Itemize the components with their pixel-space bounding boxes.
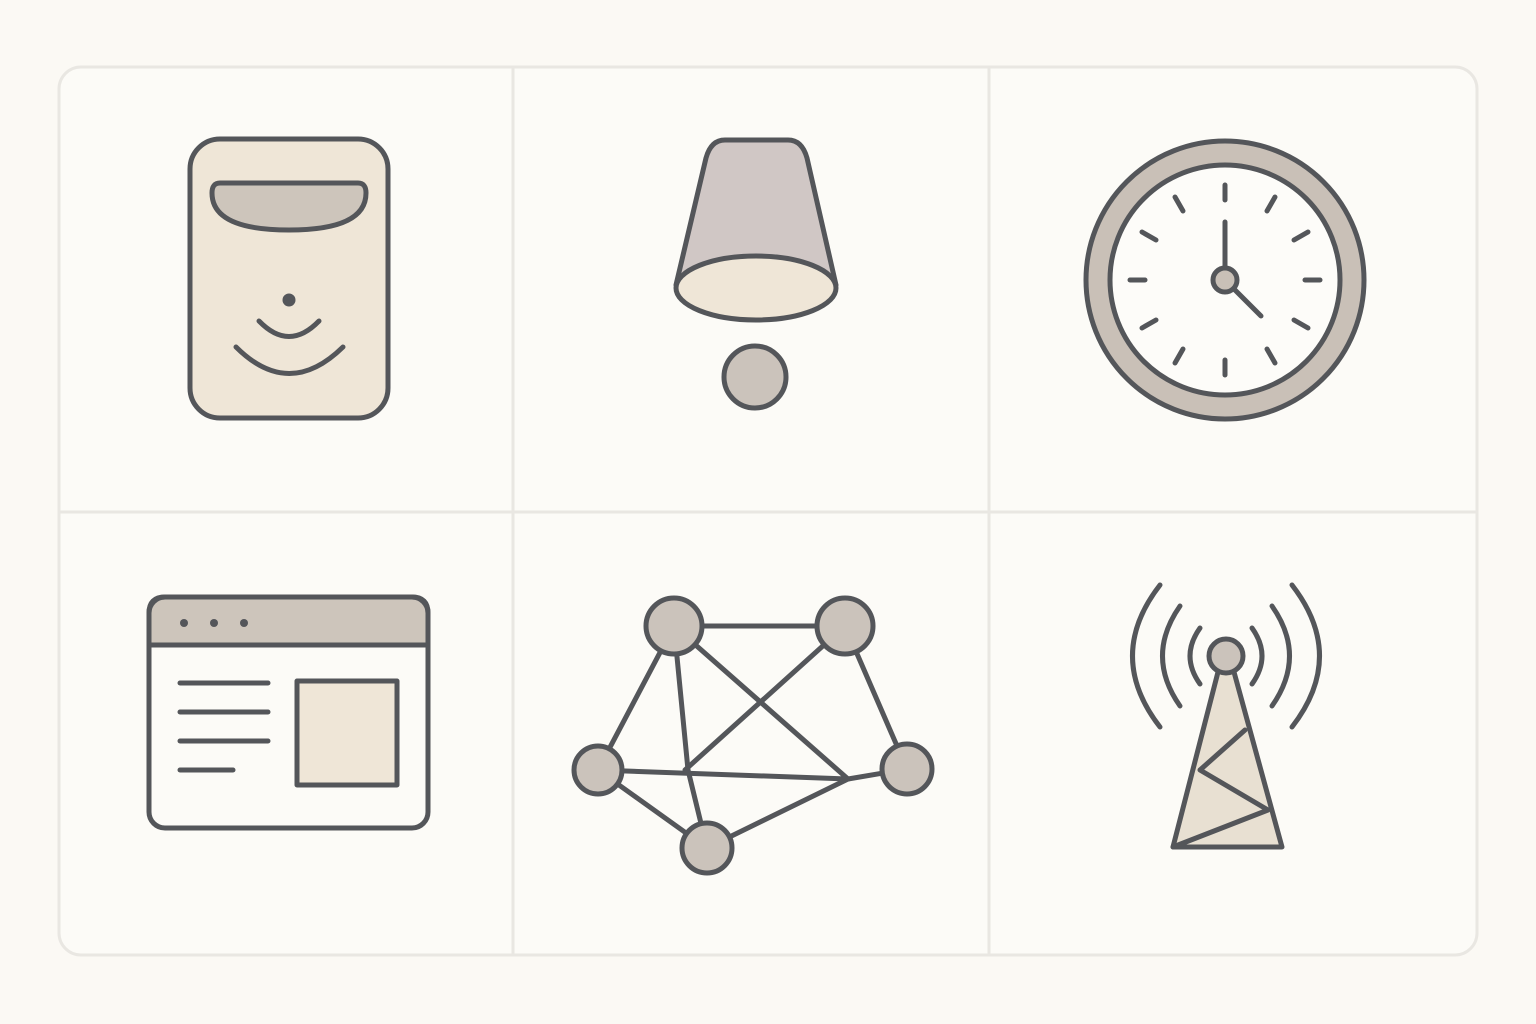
icon: network graph (574, 598, 932, 873)
icon: bell (676, 140, 836, 408)
icon: browser window (149, 597, 428, 828)
icon: contactless card (190, 139, 388, 418)
icon: radio tower (1132, 585, 1320, 847)
icon: clock (1086, 141, 1364, 419)
